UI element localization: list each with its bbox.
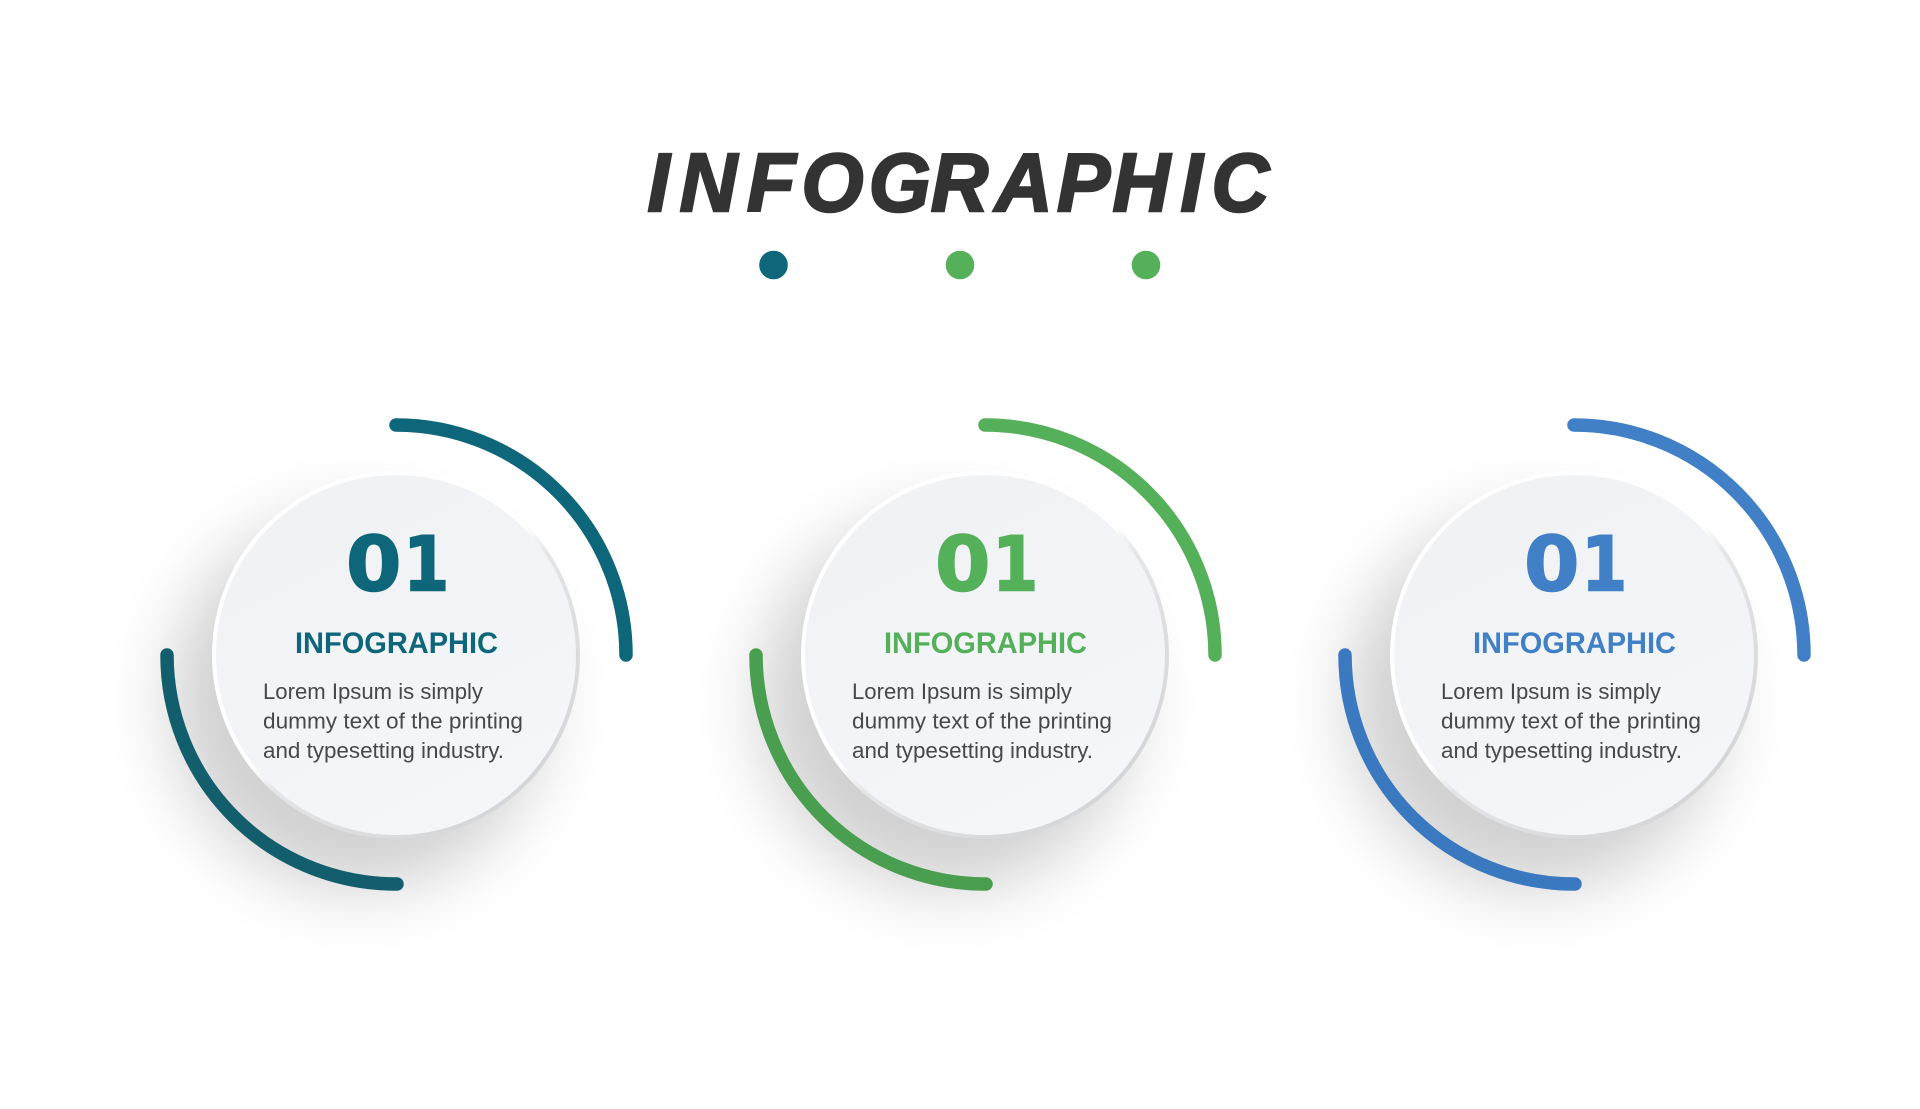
arc: teal top right	[396, 425, 626, 655]
heading: teal: INFOGRAPHIC	[295, 627, 498, 660]
text: blue description: and typesetting industry.	[1441, 738, 1682, 763]
number: green: 0	[935, 521, 991, 609]
heading: blue: INFOGRAPHIC	[1473, 627, 1676, 660]
text: teal description: dummy text of the printing	[263, 708, 523, 734]
number: teal: 1	[403, 520, 450, 609]
text: teal description: Lorem Ipsum is simply	[263, 679, 483, 704]
text: teal description: and typesetting industry.	[263, 738, 504, 763]
panel: green step	[756, 425, 1215, 890]
text: blue description: Lorem Ipsum is simply	[1441, 679, 1661, 704]
panel: teal step	[167, 425, 626, 890]
text: green description: Lorem Ipsum is simply	[852, 679, 1072, 704]
number: blue: 0	[1524, 521, 1580, 609]
arc: green bottom left	[756, 655, 986, 884]
arc: teal bottom left	[167, 655, 397, 884]
arc: blue top right	[1574, 425, 1804, 655]
number: blue: 1	[1581, 520, 1628, 609]
number: green	[935, 520, 1039, 609]
circle: green card	[803, 473, 1167, 837]
number: green: 1	[992, 520, 1039, 609]
arc: blue bottom left	[1345, 655, 1575, 884]
title: INFOGRAPHIC	[648, 137, 1270, 229]
panel: blue step	[1345, 425, 1804, 890]
text: green description: dummy text of the printing	[852, 708, 1112, 734]
heading: green: INFOGRAPHIC	[884, 627, 1087, 660]
number: blue	[1524, 520, 1628, 609]
number: teal: 0	[346, 521, 402, 609]
title dots	[759, 251, 1160, 279]
arc: green top right	[985, 425, 1215, 655]
circle: blue card	[1392, 473, 1756, 837]
text: green description: and typesetting industry.	[852, 738, 1093, 763]
text: blue description: dummy text of the printing	[1441, 708, 1701, 734]
circle: teal card	[214, 473, 578, 837]
number: teal	[346, 520, 450, 609]
